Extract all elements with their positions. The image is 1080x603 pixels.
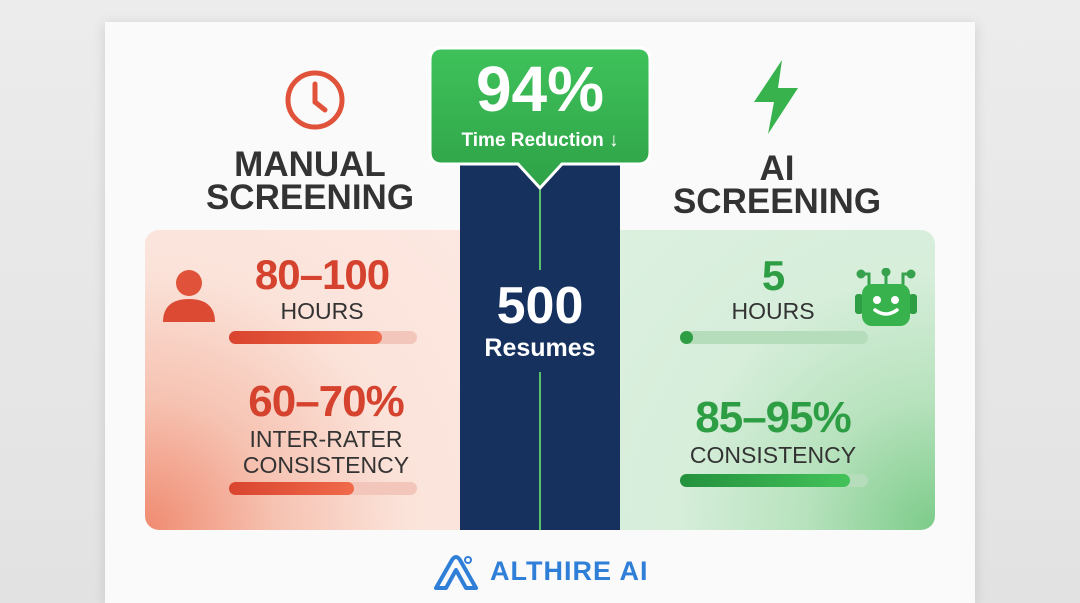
heading: ai screening: SCREENING [673, 182, 881, 221]
icon: person [163, 270, 215, 322]
heading: ai screening: AI [760, 149, 794, 188]
stat: 80-100 hours: 80–100 [255, 251, 389, 298]
stat: 5 hours: 5 [762, 252, 784, 299]
stat: 60-70%: CONSISTENCY [243, 452, 409, 478]
card [105, 22, 975, 603]
stat: 5 hours [731, 252, 815, 324]
heading: manual screening: SCREENING [206, 178, 414, 217]
logo: althire ai: ALTHIRE AI [490, 556, 648, 586]
icon: robot [855, 268, 917, 326]
bar: consistency ai [680, 474, 868, 487]
stat: 80-100 hours [255, 251, 389, 324]
logo: althire ai [434, 555, 648, 590]
panel: manual [145, 230, 461, 530]
stat: 500 resumes: 500 [497, 277, 583, 335]
callout: 94% time reduction: Time Reduction ↓ [462, 130, 618, 151]
callout: 94% time reduction [432, 50, 648, 190]
panel: ai [619, 230, 935, 530]
heading: manual screening: MANUAL [234, 145, 386, 184]
bar: hours ai [680, 331, 868, 344]
stat: 80-100 hours: HOURS [280, 298, 364, 324]
bar: hours manual [229, 331, 417, 344]
heading: ai screening [673, 149, 881, 221]
callout: 94% time reduction: 94% [476, 53, 604, 125]
stat: 85-95%: 85–95% [695, 393, 851, 442]
stat: 60-70%: INTER-RATER [250, 426, 402, 452]
heading: manual screening [206, 145, 414, 217]
stat: 60-70% [243, 377, 409, 478]
stat: 500 resumes: Resumes [484, 334, 596, 362]
icon: clock [286, 70, 344, 130]
stat: 500 resumes [484, 277, 596, 362]
icon: lightning [754, 60, 798, 134]
stat: 85-95%: CONSISTENCY [690, 442, 856, 468]
stat: 60-70%: 60–70% [248, 377, 404, 426]
center column [460, 150, 620, 530]
stat: 5 hours: HOURS [731, 298, 815, 324]
stat: 85-95% [690, 393, 856, 468]
bar: consistency manual [229, 482, 417, 495]
